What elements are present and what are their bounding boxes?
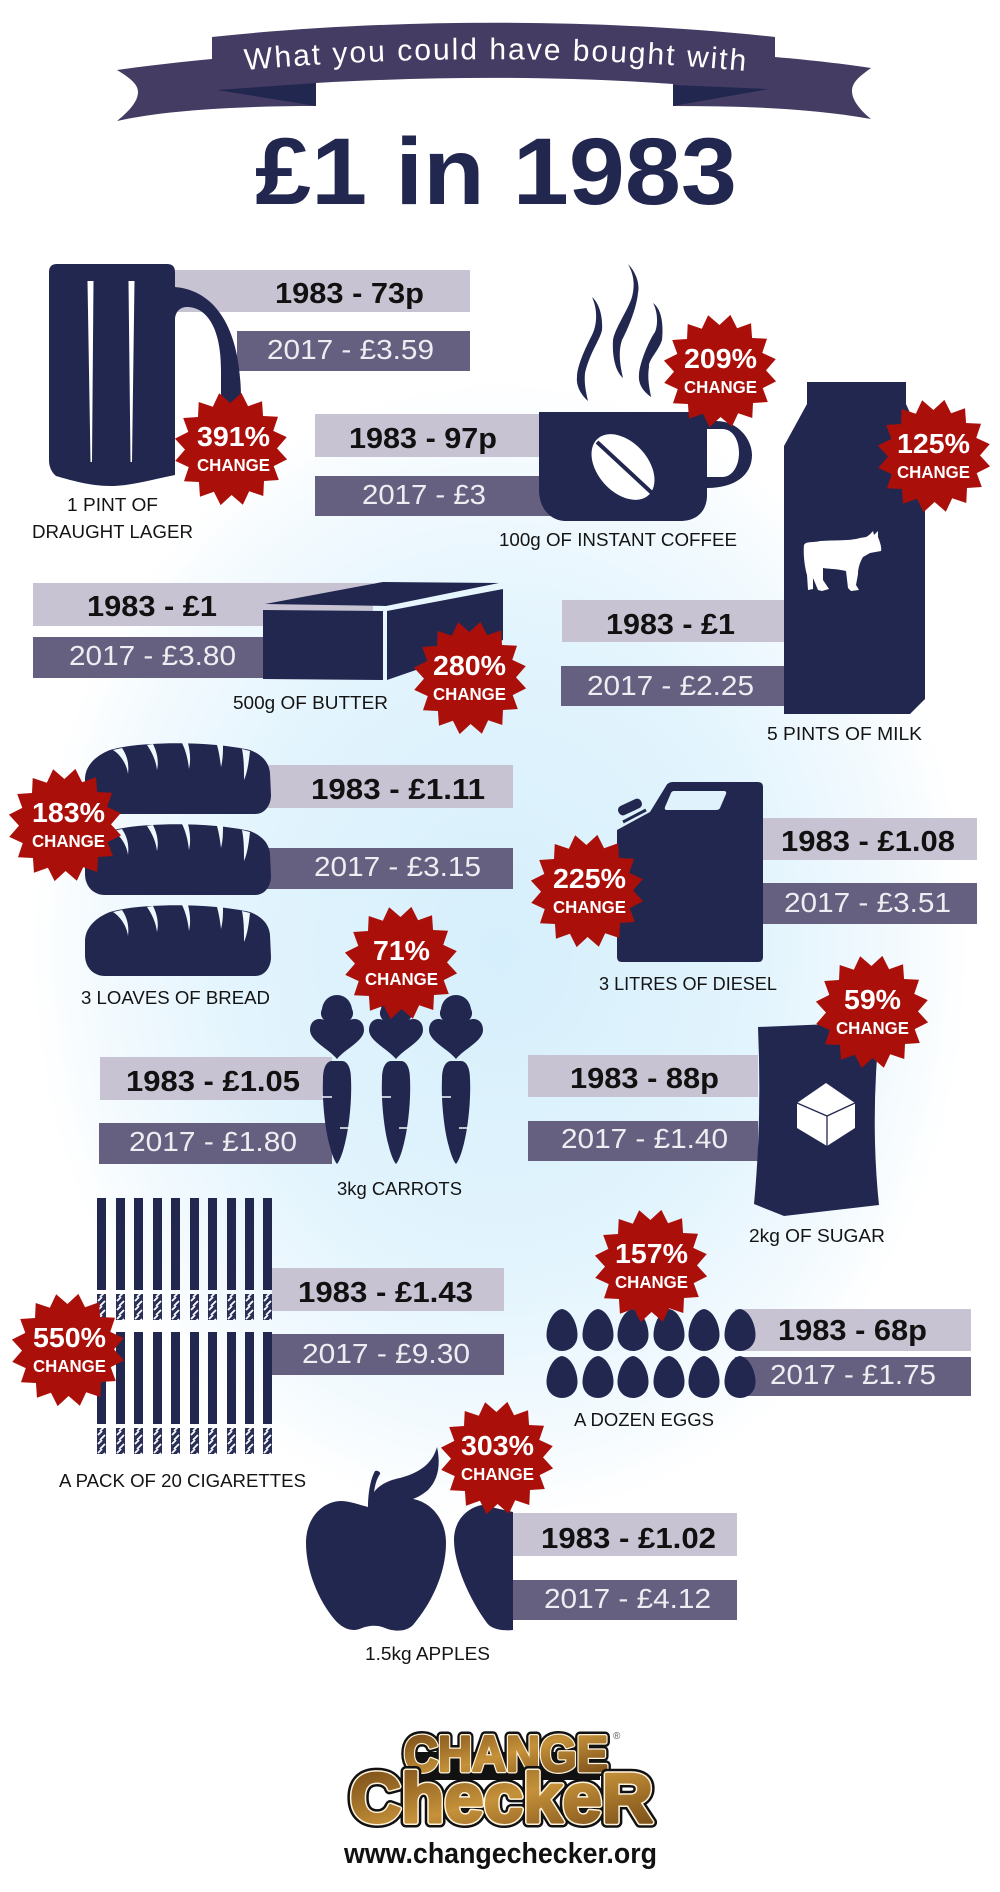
badge: 183%: 183% bbox=[32, 797, 105, 828]
panel: apples bbox=[306, 1390, 737, 1664]
panel: bread bbox=[0, 743, 513, 1008]
logo: Change Checker: CheckeR bbox=[350, 1759, 653, 1837]
icon: loaves bbox=[85, 743, 271, 976]
panel: bread: 2017 - £3.15 bbox=[314, 851, 481, 882]
badge: 59%: 59% bbox=[844, 984, 901, 1015]
logo: Change Checker: CheckeR bbox=[350, 1759, 653, 1837]
icon: cigarettes bbox=[97, 1198, 272, 1454]
badge: 71%: 71% bbox=[373, 935, 430, 966]
logo: Change Checker: ® bbox=[613, 1731, 621, 1742]
badge: 280% bbox=[402, 610, 538, 746]
logo: Change Checker: CHANGE bbox=[404, 1726, 608, 1782]
panel: carrots bbox=[99, 895, 483, 1199]
badge: 157%: CHANGE bbox=[615, 1272, 688, 1292]
badge: 550%: 550% bbox=[33, 1322, 106, 1353]
badge: 303%: CHANGE bbox=[461, 1464, 534, 1484]
icon: cow bbox=[804, 531, 881, 591]
badge: 209%: CHANGE bbox=[684, 377, 757, 397]
label bbox=[32, 494, 193, 542]
badge: 303% bbox=[429, 1390, 565, 1526]
label: 3 LITRES OF DIESEL bbox=[599, 973, 777, 994]
badge: 183% bbox=[0, 757, 133, 893]
icon: carrots bbox=[310, 995, 483, 1164]
icon: sugar bag bbox=[754, 1022, 880, 1216]
panel: sugar bbox=[528, 944, 940, 1246]
badge: 280%: CHANGE bbox=[433, 684, 506, 704]
label: 1 PINT OF bbox=[67, 494, 158, 515]
label: 3kg CARROTS bbox=[337, 1178, 462, 1199]
icon: apples bbox=[306, 1447, 513, 1631]
label: A PACK OF 20 CIGARETTES bbox=[59, 1470, 306, 1491]
panel: diesel: 1983 - £1.08 bbox=[781, 826, 955, 858]
panel: draught lager: 2017 - £3.59 bbox=[267, 334, 434, 365]
panel: cigarettes bbox=[0, 1198, 504, 1491]
panel: draught lager bbox=[32, 264, 470, 542]
icon: coffee mug bbox=[539, 412, 752, 521]
panel: eggs: 1983 - 68p bbox=[778, 1315, 927, 1347]
icon: beer mug bbox=[49, 264, 241, 486]
badge: 550% bbox=[0, 1282, 136, 1418]
badge: 225%: 225% bbox=[553, 863, 626, 894]
badge: 125%: CHANGE bbox=[897, 462, 970, 482]
label: 3 LOAVES OF BREAD bbox=[81, 987, 270, 1008]
panel: eggs: 2017 - £1.75 bbox=[770, 1359, 936, 1390]
panel: draught lager: 1983 - 73p bbox=[275, 278, 424, 310]
panel: milk: 2017 - £2.25 bbox=[587, 670, 754, 701]
badge: 71% bbox=[333, 895, 469, 1031]
panel: diesel bbox=[519, 782, 977, 994]
label: DRAUGHT LAGER bbox=[32, 521, 193, 542]
badge: 157%: 157% bbox=[615, 1238, 688, 1269]
badge: 59%: CHANGE bbox=[836, 1018, 909, 1038]
label: 100g OF INSTANT COFFEE bbox=[499, 529, 737, 550]
panel: butter: 2017 - £3.80 bbox=[69, 640, 236, 671]
banner text: What you could have bought with bbox=[244, 38, 744, 71]
main title: £1 in 1983 bbox=[255, 119, 737, 225]
badge: 125% bbox=[866, 388, 1000, 524]
panel: cigarettes: 2017 - £9.30 bbox=[302, 1338, 470, 1369]
icon: butter block bbox=[263, 582, 503, 680]
logo: Change Checker: CheckeR bbox=[350, 1759, 653, 1837]
icon: fuel can bbox=[617, 782, 763, 962]
badge: 391%: 391% bbox=[197, 421, 270, 452]
panel: bread: 1983 - £1.11 bbox=[311, 774, 485, 806]
badge: 59% bbox=[804, 944, 940, 1080]
badge: 209%: 209% bbox=[684, 343, 757, 374]
icon: steam bbox=[577, 264, 663, 401]
badge: 183%: CHANGE bbox=[32, 831, 105, 851]
label: 500g OF BUTTER bbox=[233, 692, 388, 713]
badge: 125%: 125% bbox=[897, 428, 970, 459]
badge: 303%: 303% bbox=[461, 1430, 534, 1461]
panel: milk bbox=[561, 382, 1000, 744]
panel: sugar: 1983 - 88p bbox=[570, 1063, 719, 1095]
label: 2kg OF SUGAR bbox=[749, 1225, 885, 1246]
panel: sugar: 2017 - £1.40 bbox=[561, 1123, 728, 1154]
badge: 391% bbox=[163, 381, 299, 517]
panel: apples: 1983 - £1.02 bbox=[541, 1523, 716, 1555]
panel: diesel: 2017 - £3.51 bbox=[784, 887, 951, 918]
label: 5 PINTS OF MILK bbox=[767, 723, 923, 744]
panel: carrots: 1983 - £1.05 bbox=[126, 1066, 300, 1098]
label: A DOZEN EGGS bbox=[574, 1409, 714, 1430]
panel: carrots: 2017 - £1.80 bbox=[129, 1126, 297, 1157]
icon: eggs bbox=[546, 1309, 756, 1398]
panel: butter bbox=[33, 582, 538, 746]
panel: butter: 1983 - £1 bbox=[87, 591, 217, 623]
panel: instant coffee bbox=[315, 264, 788, 550]
background glow bbox=[30, 380, 970, 1520]
badge: 391%: CHANGE bbox=[197, 455, 270, 475]
badge: 157% bbox=[583, 1198, 719, 1334]
badge: 225% bbox=[519, 823, 655, 959]
badge: 209% bbox=[652, 303, 788, 439]
badge: 280%: 280% bbox=[433, 650, 506, 681]
badge: 225%: CHANGE bbox=[553, 897, 626, 917]
panel: milk: 1983 - £1 bbox=[606, 609, 735, 641]
logo: Change Checker bbox=[350, 1726, 653, 1837]
label: 1.5kg APPLES bbox=[365, 1643, 490, 1664]
icon: milk carton bbox=[784, 382, 925, 714]
panel: cigarettes: 1983 - £1.43 bbox=[298, 1277, 473, 1309]
website url: www.changechecker.org bbox=[343, 1838, 657, 1870]
panel: instant coffee: 2017 - £3 bbox=[362, 479, 486, 510]
badge: 550%: CHANGE bbox=[33, 1356, 106, 1376]
panel: eggs bbox=[546, 1198, 971, 1430]
badge: 71%: CHANGE bbox=[365, 969, 438, 989]
title banner bbox=[117, 22, 871, 121]
logo: Change Checker: CHANGE bbox=[404, 1726, 608, 1782]
panel: apples: 2017 - £4.12 bbox=[544, 1583, 711, 1614]
panel: instant coffee: 1983 - 97p bbox=[349, 423, 497, 455]
logo: Change Checker: CHANGE bbox=[404, 1726, 608, 1782]
